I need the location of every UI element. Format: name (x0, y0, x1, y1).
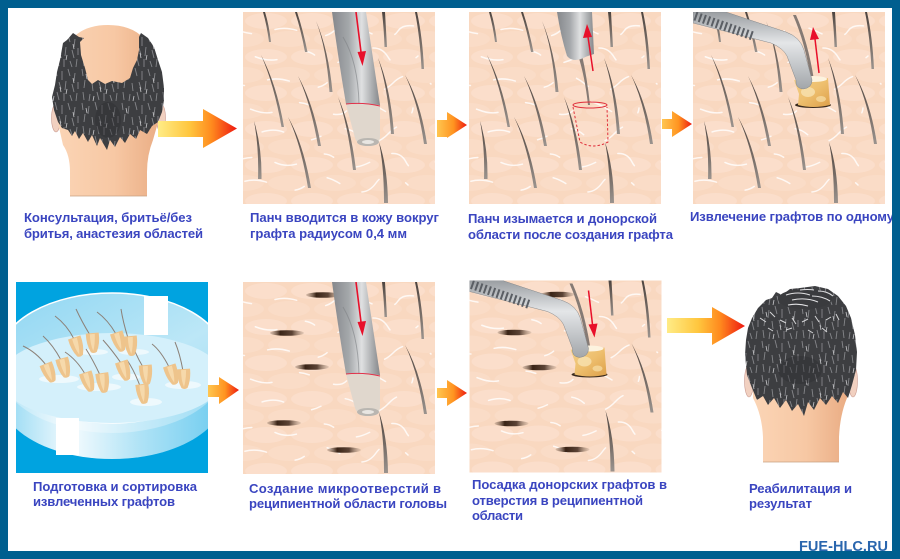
illustration: restored head, back view (744, 286, 858, 462)
panel: creating micro-holes (243, 282, 435, 474)
dish rim (16, 292, 208, 424)
caption: step 8: результат (749, 496, 813, 511)
panel: implanting the graft (470, 280, 662, 472)
arrow: step 5 to step 6 (208, 377, 239, 404)
caption: step 7: области (472, 508, 523, 523)
caption: step 5: Подготовка и сортировка (33, 479, 198, 494)
highlight: lower (56, 418, 79, 455)
caption: step 3 (468, 211, 674, 242)
panel: punch removed with cylinder outline (469, 12, 661, 204)
grafts (40, 330, 191, 405)
caption: step 1 (24, 210, 203, 241)
graft shadows (39, 349, 201, 406)
caption: step 7: отверстия в реципиентной (472, 493, 643, 508)
caption: step 7: Посадка донорских графтов в (472, 477, 667, 492)
graft hairs (23, 309, 183, 386)
arrow: step 3 to step 4 (662, 111, 692, 137)
caption: step 7 (472, 477, 667, 523)
arrow: step 7 to result (667, 307, 745, 345)
caption: step 5 (33, 479, 198, 509)
dish body (16, 401, 208, 459)
caption: step 6: реципиентной области головы (249, 496, 447, 511)
caption: step 3: Панч изымается и донорской (468, 211, 657, 226)
caption: step 2: графта радиусом 0,4 мм (250, 226, 407, 241)
illustration: balding head, back view (52, 25, 166, 196)
caption: step 6 (249, 481, 447, 511)
caption: step 6: Создание микроотверстий в (249, 481, 441, 496)
panel: graft extraction with tweezers (693, 12, 885, 204)
caption: step 1: бритья, анастезия областей (24, 226, 203, 241)
arrow: step 2 to step 3 (437, 112, 467, 138)
caption: step 4: Извлечение графтов по одному (690, 209, 895, 224)
caption: step 2: Панч вводится в кожу вокруг (250, 210, 440, 225)
caption: step 3: области после создания графта (468, 227, 674, 242)
panel: graft sorting in a Petri dish (16, 282, 208, 473)
caption: step 5: извлеченных графтов (33, 494, 175, 509)
arrow: step 6 to step 7 (437, 380, 467, 406)
watermark: site name: FUE-HLC.RU (799, 539, 888, 555)
panel: punch inserted (243, 12, 435, 204)
dish floor (16, 333, 208, 423)
caption: step 8: Реабилитация и (749, 481, 852, 496)
highlight: upper (144, 296, 168, 335)
caption: step 8 (749, 481, 852, 511)
caption: step 2 (250, 210, 440, 241)
caption: step 1: Консультация, бритьё/без (24, 210, 192, 225)
arrow: step 1 to step 2 (158, 109, 237, 148)
dish inner band (16, 401, 208, 433)
